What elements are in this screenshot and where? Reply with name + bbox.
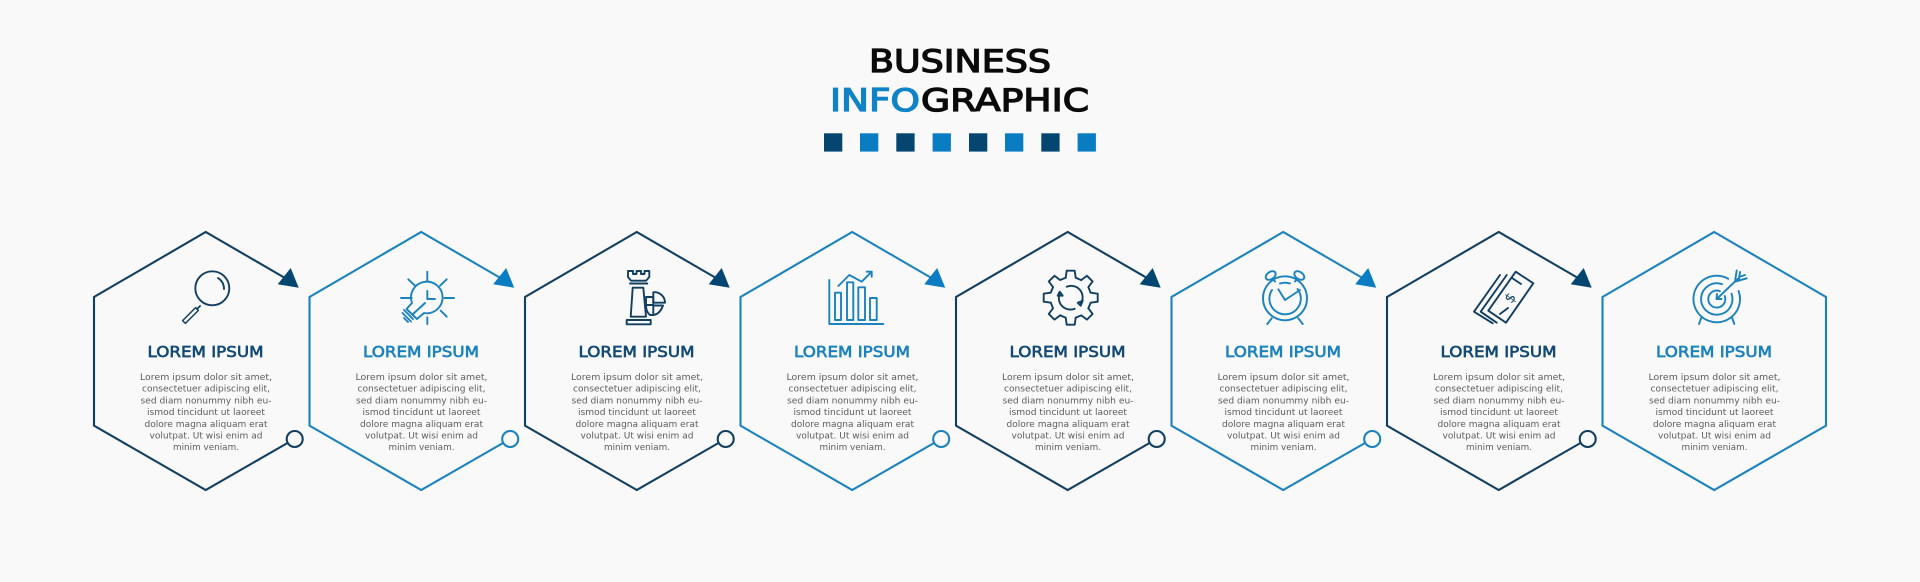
body text: ismod tincidunt ut laoreet xyxy=(1656,408,1774,418)
body text: consectetuer adipiscing elit, xyxy=(1004,385,1132,395)
body text: sed diam nonummy nibh eu- xyxy=(1434,396,1564,406)
body text: dolore magna aliquam erat xyxy=(1438,420,1561,430)
body text: minim veniam. xyxy=(1466,443,1532,453)
body text: volutpat. Ut wisi enim ad xyxy=(1012,432,1124,442)
body text xyxy=(140,373,272,453)
heading: LOREM IPSUM xyxy=(1225,343,1341,361)
body text: minim veniam. xyxy=(820,443,886,453)
body text xyxy=(786,373,918,453)
hexagon outline with arrow and circle xyxy=(1172,232,1380,490)
body text: dolore magna aliquam erat xyxy=(576,420,699,430)
panel 1: magnifier xyxy=(94,232,303,490)
heading: LOREM IPSUM xyxy=(1010,343,1126,361)
hexagon outline with arrow and circle xyxy=(310,232,518,490)
body text: volutpat. Ut wisi enim ad xyxy=(1442,432,1556,442)
body text: Lorem ipsum dolor sit amet, xyxy=(571,373,703,383)
body text: ismod tincidunt ut laoreet xyxy=(147,408,266,418)
body text: ismod tincidunt ut laoreet xyxy=(1440,408,1559,418)
body text: minim veniam. xyxy=(604,443,670,453)
body text: consectetuer adipiscing elit, xyxy=(142,385,270,395)
closed hexagon outline xyxy=(1602,232,1826,490)
body text: minim veniam. xyxy=(173,443,239,453)
panel 3: strategy xyxy=(525,232,734,490)
heading: LOREM IPSUM xyxy=(1440,343,1556,361)
body text: ismod tincidunt ut laoreet xyxy=(1224,408,1343,418)
body text: volutpat. Ut wisi enim ad xyxy=(580,432,694,442)
body text: volutpat. Ut wisi enim ad xyxy=(1227,432,1340,442)
panel 2: idea xyxy=(310,232,518,490)
icon: stack of bank notes: $ xyxy=(1502,290,1520,307)
body text: minim veniam. xyxy=(1682,443,1748,453)
body text: sed diam nonummy nibh eu- xyxy=(572,396,702,406)
body text: consectetuer adipiscing elit, xyxy=(1435,385,1563,395)
hexagon outline with arrow and circle xyxy=(740,232,949,490)
body text: dolore magna aliquam erat xyxy=(360,420,484,430)
body text: sed diam nonummy nibh eu- xyxy=(1649,396,1780,406)
icon: alarm clock xyxy=(1263,269,1307,324)
heading: LOREM IPSUM xyxy=(148,343,264,361)
body text: Lorem ipsum dolor sit amet, xyxy=(1433,373,1565,383)
body text xyxy=(1648,373,1780,453)
body text: volutpat. Ut wisi enim ad xyxy=(796,432,909,442)
body text: consectetuer adipiscing elit, xyxy=(1220,385,1348,395)
hexagon outline with arrow and circle xyxy=(94,232,303,490)
icon: stack of bank notes xyxy=(1474,272,1533,323)
icon: target with arrow xyxy=(1693,270,1747,324)
body text: dolore magna aliquam erat xyxy=(1653,420,1777,430)
body text: Lorem ipsum dolor sit amet, xyxy=(1648,373,1780,383)
body text: Lorem ipsum dolor sit amet, xyxy=(1218,373,1350,383)
hexagon outline with arrow and circle xyxy=(956,232,1165,490)
body text: dolore magna aliquam erat xyxy=(144,420,268,430)
title: BUSINESS xyxy=(869,44,1051,80)
heading: LOREM IPSUM xyxy=(363,343,479,361)
body text: minim veniam. xyxy=(388,443,454,453)
body text: dolore magna aliquam erat xyxy=(1006,420,1130,430)
panel 6: time xyxy=(1172,232,1380,490)
body text: minim veniam. xyxy=(1250,443,1316,453)
body text: sed diam nonummy nibh eu- xyxy=(356,396,487,406)
body text xyxy=(1433,373,1565,453)
body text: volutpat. Ut wisi enim ad xyxy=(150,432,262,442)
panel 4: growth xyxy=(740,232,949,490)
icon: light bulb with clock xyxy=(401,272,454,324)
body text: consectetuer adipiscing elit, xyxy=(1650,385,1778,395)
hexagon outline with arrow and circle xyxy=(525,232,734,490)
body text: minim veniam. xyxy=(1035,443,1101,453)
body text xyxy=(571,373,703,453)
body text: ismod tincidunt ut laoreet xyxy=(362,408,481,418)
body text: sed diam nonummy nibh eu- xyxy=(140,396,272,406)
body text: dolore magna aliquam erat xyxy=(1222,420,1346,430)
body text: consectetuer adipiscing elit, xyxy=(573,385,701,395)
heading: LOREM IPSUM xyxy=(794,343,910,361)
body text: Lorem ipsum dolor sit amet, xyxy=(140,373,272,383)
body text: ismod tincidunt ut laoreet xyxy=(794,408,912,418)
title: INFO xyxy=(830,83,920,119)
icon: gear with rotating arrows xyxy=(1044,271,1098,325)
panel 7: money xyxy=(1387,232,1596,490)
body text: sed diam nonummy nibh eu- xyxy=(787,396,918,406)
icon: bar chart with trend arrow xyxy=(829,272,883,324)
title xyxy=(830,44,1089,119)
body text: consectetuer adipiscing elit, xyxy=(788,385,916,395)
heading: LOREM IPSUM xyxy=(578,343,694,361)
heading: LOREM IPSUM xyxy=(1656,343,1772,361)
body text xyxy=(1218,373,1350,453)
title: GRAPHIC xyxy=(921,83,1089,119)
body text: Lorem ipsum dolor sit amet, xyxy=(1002,373,1134,383)
body text: consectetuer adipiscing elit, xyxy=(358,385,486,395)
body text: dolore magna aliquam erat xyxy=(791,420,915,430)
body text: Lorem ipsum dolor sit amet, xyxy=(356,373,488,383)
body text: ismod tincidunt ut laoreet xyxy=(578,408,697,418)
body text xyxy=(356,373,488,453)
body text: sed diam nonummy nibh eu- xyxy=(1218,396,1349,406)
panel 5: settings xyxy=(956,232,1165,490)
body text: ismod tincidunt ut laoreet xyxy=(1009,408,1128,418)
hexagon outline with arrow and circle xyxy=(1387,232,1596,490)
square row under title xyxy=(824,133,1096,152)
body text: volutpat. Ut wisi enim ad xyxy=(365,432,478,442)
panel 8: target xyxy=(1602,232,1826,490)
icon: chess rook with pie chart xyxy=(627,271,665,324)
body text xyxy=(1002,373,1134,453)
body text: Lorem ipsum dolor sit amet, xyxy=(786,373,918,383)
body text: sed diam nonummy nibh eu- xyxy=(1002,396,1134,406)
body text: volutpat. Ut wisi enim ad xyxy=(1658,432,1771,442)
icon: magnifying glass xyxy=(183,271,229,323)
